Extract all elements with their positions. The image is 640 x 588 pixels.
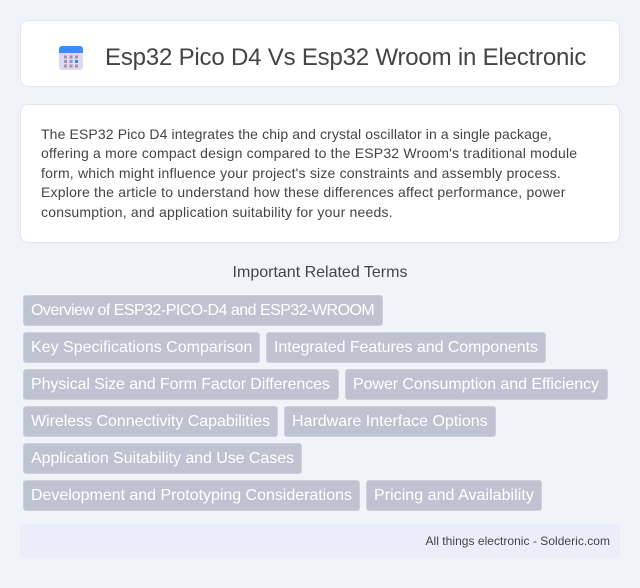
tag (23, 480, 360, 511)
tag: Application Suitability and Use Cases (31, 450, 294, 467)
intro paragraph: Explore the article to understand how these differences affect performance, power (41, 184, 566, 200)
tag list (23, 295, 608, 511)
tag: Pricing and Availability (374, 487, 534, 504)
title: Esp32 Pico D4 Vs Esp32 Wroom in Electronic (105, 44, 586, 71)
tag: Key Specifications Comparison (31, 339, 252, 356)
tag (345, 369, 608, 400)
tag (284, 406, 496, 437)
tag (23, 443, 302, 474)
footer bar (20, 524, 620, 558)
tag: Overview of ESP32-PICO-D4 and ESP32-WROOM (31, 302, 374, 319)
header panel (20, 20, 620, 87)
intro paragraph: form, which might influence your project's size constraints and assembly process. (41, 165, 561, 181)
intro paragraph: The ESP32 Pico D4 integrates the chip and crystal oscillator in a single package, (41, 126, 552, 142)
intro paragraph (41, 126, 577, 220)
tag (23, 369, 339, 400)
tag: Hardware Interface Options (292, 413, 488, 430)
tag (23, 406, 278, 437)
intro text panel (20, 104, 620, 243)
intro paragraph: offering a more compact design compared to the ESP32 Wroom's traditional module (41, 145, 577, 161)
tag (266, 332, 546, 363)
tag: Wireless Connectivity Capabilities (31, 413, 270, 430)
icon: calendar (59, 46, 83, 70)
intro paragraph: consumption, and application suitability for your needs. (41, 204, 393, 220)
tag (23, 332, 260, 363)
section heading: Important Related Terms (233, 264, 407, 281)
tag: Integrated Features and Components (274, 339, 538, 356)
tag: Development and Prototyping Considerations (31, 487, 352, 504)
tag: Power Consumption and Efficiency (353, 376, 599, 393)
tag (23, 295, 383, 326)
footer text: All things electronic - Solderic.com (426, 534, 610, 548)
tag (366, 480, 542, 511)
tag: Physical Size and Form Factor Differences (31, 376, 330, 393)
